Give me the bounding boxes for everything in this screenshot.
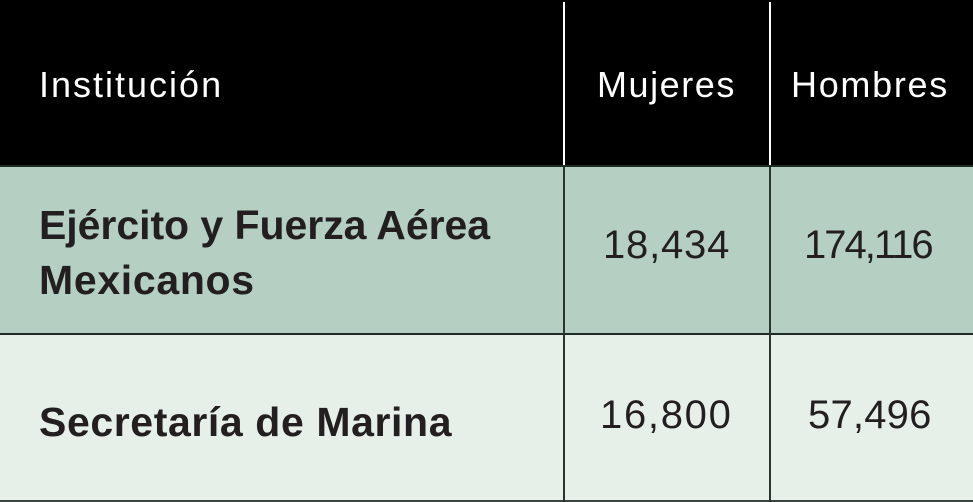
value: women 16,800: 16,800	[600, 393, 733, 437]
institution name: Secretaría de Marina: Secretaría de Marina	[39, 399, 452, 445]
institution name: Ejército y Fuerza Aérea Mexicanos: Mexicanos	[39, 257, 255, 303]
table header row	[0, 0, 973, 166]
institution name: Ejército y Fuerza Aérea Mexicanos	[39, 202, 490, 303]
row: Secretaría de Marina	[0, 335, 973, 502]
value: men 174,116: 174,116	[804, 223, 932, 267]
header: Institución: Institución	[39, 64, 223, 105]
row: Ejército y Fuerza Aérea Mexicanos	[0, 166, 973, 333]
value: women 18,434: 18,434	[603, 223, 730, 267]
header: Mujeres: Mujeres	[597, 64, 736, 105]
value: men 57,496: 57,496	[808, 393, 932, 437]
header: Hombres: Hombres	[791, 64, 949, 105]
institution name: Ejército y Fuerza Aérea Mexicanos: Ejército y Fuerza Aérea	[39, 202, 490, 248]
